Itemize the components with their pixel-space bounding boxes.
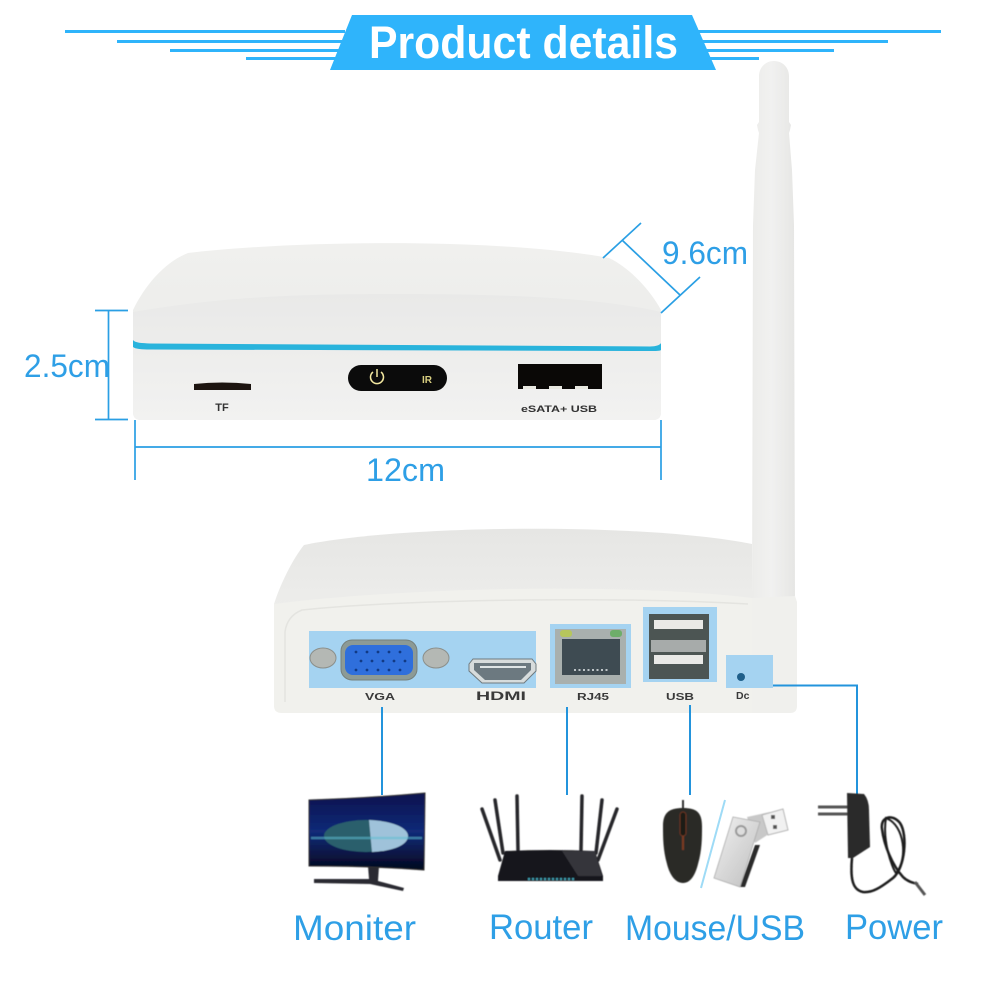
RJ45 highlight xyxy=(550,624,631,688)
antenna xyxy=(752,61,795,600)
title banner xyxy=(65,15,941,70)
device labels: Router xyxy=(489,908,593,947)
dimension: depth 9.6cm: 9.6cm xyxy=(662,235,748,271)
USB highlight xyxy=(643,607,717,682)
power and IR panel xyxy=(348,365,447,391)
dimension: height 2.5cm xyxy=(24,310,128,420)
icon: monitor xyxy=(309,793,425,891)
VGA and HDMI highlight xyxy=(309,631,536,688)
icon: router xyxy=(482,796,617,881)
title text: Product details xyxy=(369,17,678,68)
port labels: RJ45 xyxy=(577,691,609,703)
divider between mouse and USB xyxy=(701,800,725,888)
device labels: Power xyxy=(845,908,943,947)
device labels: Moniter xyxy=(293,909,416,948)
connector lines xyxy=(382,686,857,795)
front view of device xyxy=(133,243,661,420)
dimension: height 2.5cm: 2.5cm xyxy=(24,348,110,384)
DC highlight xyxy=(726,655,773,688)
TF card slot xyxy=(194,382,251,414)
dimension: width 12cm xyxy=(135,420,661,488)
rear view of device xyxy=(274,529,797,713)
icon: power adapter xyxy=(818,793,925,895)
icon: USB stick xyxy=(714,809,788,887)
device labels: Mouse/USB xyxy=(625,909,805,948)
VGA port xyxy=(310,640,449,680)
dimension: width 12cm: 12cm xyxy=(366,452,445,488)
device labels xyxy=(293,908,943,948)
blue LED stripe xyxy=(133,340,661,351)
power and IR panel: IR xyxy=(422,375,433,386)
eSATA USB port: eSATA+ USB xyxy=(521,404,597,415)
port labels: HDMI xyxy=(476,691,526,703)
eSATA USB port xyxy=(518,364,602,415)
port labels: Dc xyxy=(736,690,750,702)
TF card slot: TF xyxy=(215,402,229,414)
port labels: USB xyxy=(666,691,695,703)
icon: mouse xyxy=(663,800,702,883)
dimension: depth 9.6cm xyxy=(603,223,748,313)
port labels: VGA xyxy=(365,691,396,703)
port labels xyxy=(365,690,750,703)
HDMI port xyxy=(469,659,536,683)
